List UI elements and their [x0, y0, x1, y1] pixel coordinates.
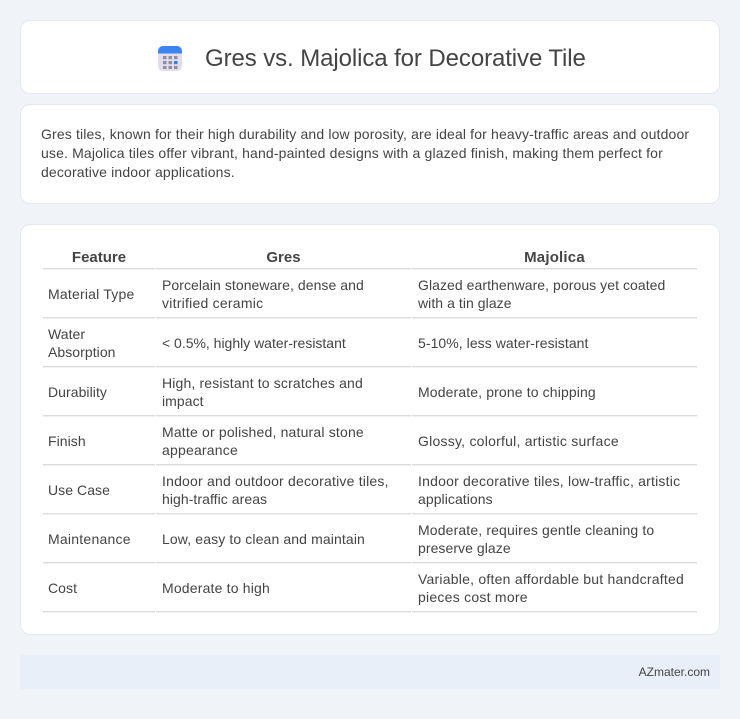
header panel	[20, 20, 720, 94]
comparison table panel: high-traffic areas	[162, 491, 267, 507]
comparison table panel: Indoor and outdoor decorative tiles,	[162, 473, 389, 489]
row: Cost	[48, 571, 684, 605]
intro text	[41, 126, 689, 180]
comparison table panel: Low, easy to clean and maintain	[162, 531, 365, 547]
comparison table panel: Use Case	[48, 482, 110, 498]
row: Material Type	[48, 277, 665, 311]
comparison table panel: Matte or polished, natural stone	[162, 424, 364, 440]
comparison table panel: Moderate, requires gentle cleaning to	[418, 522, 654, 538]
row: Water Absorption	[48, 326, 588, 360]
comparison table panel: Moderate to high	[162, 580, 270, 596]
comparison table panel: pieces cost more	[418, 589, 528, 605]
comparison table panel: vitrified ceramic	[162, 295, 263, 311]
intro text panel	[20, 104, 720, 204]
comparison table panel: Durability	[48, 384, 107, 400]
comparison table panel: with a tin glaze	[418, 295, 512, 311]
comparison table panel: Porcelain stoneware, dense and	[162, 277, 364, 293]
comparison table panel: Moderate, prone to chipping	[418, 384, 596, 400]
icon: calendar grid	[158, 46, 182, 71]
comparison table panel: preserve glaze	[418, 540, 511, 556]
intro text: decorative indoor applications.	[41, 164, 235, 180]
comparison table panel: Glazed earthenware, porous yet coated	[418, 277, 665, 293]
title: Gres vs. Majolica for Decorative Tile	[205, 45, 586, 72]
comparison table panel	[20, 224, 720, 635]
comparison table panel: Cost	[48, 580, 77, 596]
row: Maintenance	[48, 522, 654, 556]
comparison table panel: Variable, often affordable but handcrafted	[418, 571, 684, 587]
intro text: use. Majolica tiles offer vibrant, hand-painted designs with a glazed finish, making them perfect for	[41, 145, 663, 161]
row: Use Case	[48, 473, 680, 507]
comparison table panel: applications	[418, 491, 493, 507]
footer source text: AZmater.com	[639, 665, 710, 679]
row: Durability	[48, 375, 596, 409]
comparison table panel: High, resistant to scratches and	[162, 375, 363, 391]
comparison table panel: 5-10%, less water-resistant	[418, 335, 588, 351]
comparison table panel: Absorption	[48, 344, 116, 360]
comparison table panel: impact	[162, 393, 204, 409]
comparison table panel: Glossy, colorful, artistic surface	[418, 433, 619, 449]
table header: Feature: Feature	[72, 249, 126, 266]
intro text: Gres tiles, known for their high durability and low porosity, are ideal for heavy-traffic areas and outdoor	[41, 126, 689, 142]
comparison table panel: appearance	[162, 442, 238, 458]
comparison table panel: Water	[48, 326, 85, 342]
comparison table panel: < 0.5%, highly water-resistant	[162, 335, 346, 351]
comparison table panel: Indoor decorative tiles, low-traffic, artistic	[418, 473, 680, 489]
footer bar	[20, 655, 720, 689]
comparison table panel: Finish	[48, 433, 86, 449]
table header: Majolica: Majolica	[524, 249, 585, 266]
comparison table panel: Material Type	[48, 286, 135, 302]
comparison table panel: Maintenance	[48, 531, 131, 547]
row: Finish	[48, 424, 619, 458]
table header: Gres: Gres	[266, 249, 301, 266]
